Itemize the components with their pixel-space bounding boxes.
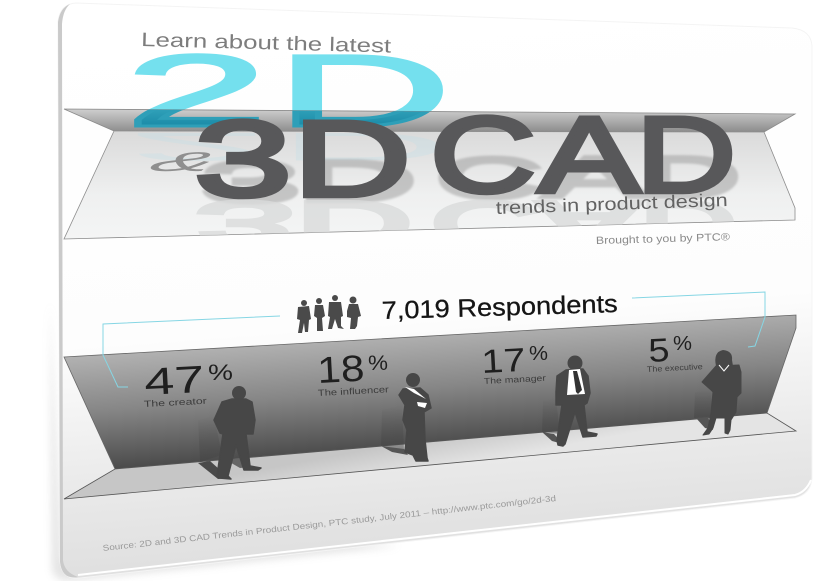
heading: 2D bbox=[125, 34, 451, 148]
heading: 3D CAD: C bbox=[430, 94, 536, 215]
heading: 3D CAD: D bbox=[293, 98, 411, 219]
collar bbox=[719, 365, 729, 371]
floor panel bbox=[64, 413, 796, 499]
credit: Brought to you by PTC® bbox=[596, 231, 730, 247]
2D reflection bbox=[138, 133, 436, 161]
2D dark overlap bbox=[134, 110, 430, 128]
top fold of banner bbox=[64, 109, 795, 132]
stat: manager bbox=[480, 341, 548, 386]
heading: 3D CAD bbox=[194, 94, 736, 219]
wall shadow bbox=[542, 398, 560, 434]
2D reflection: D bbox=[276, 124, 451, 168]
left bracket bbox=[103, 316, 280, 387]
banner shadows and reflections bbox=[138, 133, 739, 236]
3D CAD drop shadow: 3 bbox=[202, 150, 300, 215]
heading: 3D CAD: D bbox=[636, 94, 736, 215]
silhouette bbox=[715, 350, 733, 366]
silhouette bbox=[406, 373, 420, 387]
banner front panel bbox=[64, 131, 795, 239]
stat: influencer: 18 bbox=[316, 348, 365, 391]
stat: manager: The manager bbox=[484, 373, 546, 386]
stat: executive bbox=[647, 331, 704, 374]
stat: creator: The creator bbox=[144, 396, 207, 409]
stat: manager: % bbox=[529, 343, 548, 365]
floor shadow bbox=[381, 446, 408, 455]
card left edge bbox=[58, 4, 78, 577]
2D cyan letters bbox=[125, 34, 451, 148]
wall shadow bbox=[381, 405, 404, 450]
stat: executive: The executive bbox=[647, 362, 704, 374]
figure: creator bbox=[198, 386, 261, 479]
3D CAD floor reflection: 3 bbox=[196, 189, 294, 256]
subheading: trends in product design bbox=[495, 190, 728, 218]
figure: executive bbox=[694, 350, 741, 435]
stat: creator: 47 bbox=[143, 359, 205, 404]
3D CAD floor reflection: D bbox=[640, 189, 736, 256]
3D CAD drop shadow: D bbox=[642, 145, 740, 210]
silhouette bbox=[232, 386, 246, 400]
3D CAD floor reflection bbox=[196, 200, 734, 236]
heading: 7,019 respondents: 7,019 Respondents bbox=[381, 290, 618, 325]
silhouette bbox=[568, 356, 582, 370]
3D CAD drop shadow bbox=[202, 154, 739, 203]
floor shadow bbox=[542, 432, 563, 444]
heading: 3D CAD: 3 bbox=[194, 98, 292, 219]
floor shadow bbox=[198, 461, 229, 479]
stat: influencer bbox=[316, 348, 389, 398]
3D CAD drop shadow: D bbox=[298, 149, 416, 214]
stat: influencer: The influencer bbox=[318, 384, 389, 398]
heading: learn about: Learn about the latest bbox=[141, 29, 392, 58]
stat: executive: % bbox=[673, 333, 692, 355]
ampersand: & bbox=[141, 146, 228, 177]
shirt details bbox=[405, 387, 427, 408]
card shadow bbox=[50, 300, 400, 581]
3D CAD drop shadow: C bbox=[436, 146, 542, 211]
2D dark overlap: 2 bbox=[125, 34, 268, 148]
source note: Source: 2D and 3D CAD Trends in Product Design, PTC study, July 2011 – http://www.ptc.com/go/2d-3d bbox=[102, 493, 557, 553]
wall panel bbox=[64, 315, 796, 469]
2D dark overlap: D bbox=[276, 34, 451, 148]
3D CAD drop shadow: A bbox=[544, 145, 647, 210]
card bottom rim bbox=[78, 480, 811, 575]
2D cyan letters: 2 bbox=[125, 34, 268, 148]
heading: 3D CAD: A bbox=[538, 94, 640, 215]
2D reflection: 2 bbox=[125, 124, 268, 168]
tie bbox=[573, 371, 582, 394]
shirt bbox=[567, 369, 585, 395]
respondents icon bbox=[297, 295, 361, 333]
3D CAD floor reflection: D bbox=[296, 189, 412, 256]
floor shadow bbox=[696, 417, 713, 430]
stat: executive: 5 bbox=[647, 331, 670, 369]
wall shadow bbox=[198, 416, 222, 462]
figure: manager bbox=[542, 356, 597, 446]
stat: manager: 17 bbox=[480, 341, 526, 380]
stat: creator bbox=[143, 359, 233, 409]
3D CAD floor reflection: C bbox=[431, 189, 537, 256]
stat: influencer: % bbox=[368, 352, 388, 375]
2D cyan letters: D bbox=[276, 34, 451, 148]
stat: creator: % bbox=[208, 360, 233, 385]
wall shadow bbox=[694, 390, 712, 418]
3D CAD floor reflection: A bbox=[538, 189, 640, 256]
figure: influencer bbox=[381, 373, 431, 461]
right bracket bbox=[632, 292, 765, 347]
